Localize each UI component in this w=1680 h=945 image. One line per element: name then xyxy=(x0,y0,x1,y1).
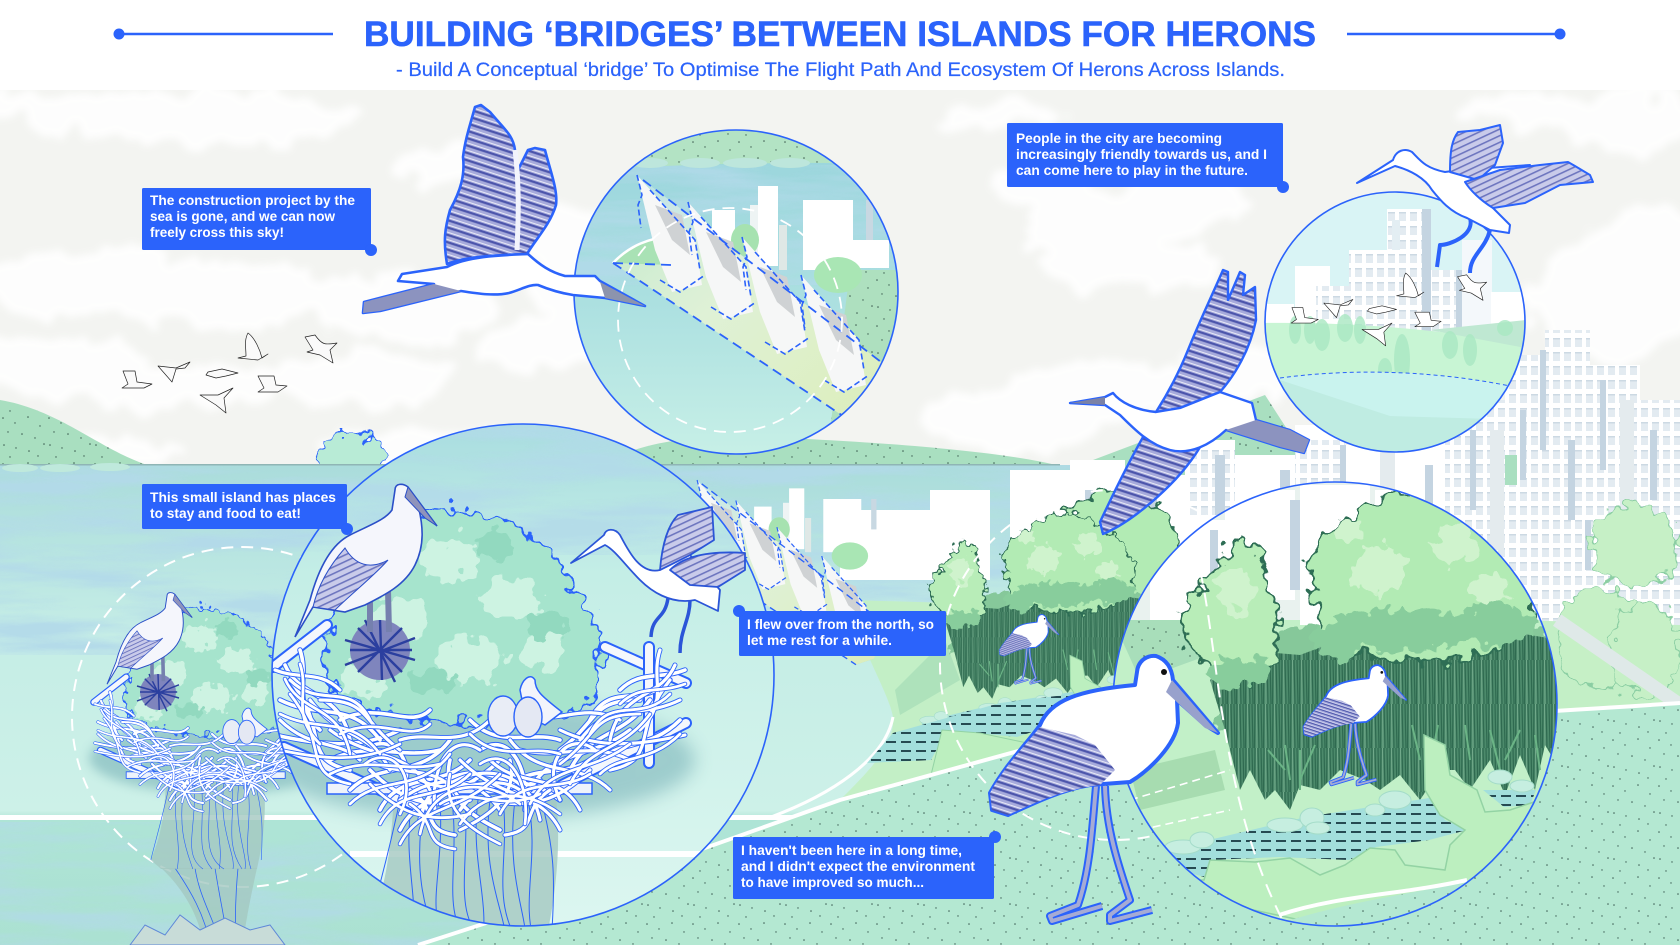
callout: construction project: sea is gone, and we can now xyxy=(150,208,335,224)
callout: flew from the north: let me rest for a while. xyxy=(747,632,892,648)
callout: construction project: The construction project by the xyxy=(150,192,355,208)
circle: city close-up xyxy=(1260,190,1530,460)
background bridge wedge xyxy=(679,480,889,665)
front land xyxy=(418,703,1680,945)
title rule left xyxy=(114,28,333,40)
callout: flew from the north: I flew over from the north, so xyxy=(747,616,934,632)
title rule right xyxy=(1347,28,1566,40)
callout: flew from the north xyxy=(733,605,946,656)
circle: nest island close-up xyxy=(265,424,774,945)
callout: improved environment xyxy=(733,831,1001,899)
callout: small island xyxy=(142,484,353,535)
heron: landing by the nest xyxy=(571,507,745,653)
mid ground land xyxy=(771,600,1680,817)
background extra tree xyxy=(1010,490,1193,624)
sky with clouds xyxy=(0,90,1680,490)
subtitle: - Build A Conceptual ‘bridge’ To Optimise The Flight Path And Ecosystem Of Herons Across Islands. xyxy=(396,59,1285,81)
distant small tree xyxy=(316,433,388,481)
heron: flying mid right xyxy=(1070,270,1309,534)
circle: bridge close-up xyxy=(570,125,905,460)
background road xyxy=(1557,620,1680,705)
callout: friendly people: can come here to play in the future. xyxy=(1016,162,1248,178)
background water xyxy=(867,693,1081,775)
left small nest island xyxy=(89,593,347,945)
sea xyxy=(0,463,1100,945)
dashed ghost rings xyxy=(72,490,1290,887)
heron: large standing foreground xyxy=(990,656,1218,921)
background city skyline xyxy=(840,330,1680,640)
distant hills xyxy=(0,395,1680,520)
circle: wetland close-up xyxy=(1110,480,1560,930)
callout: small island: This small island has places xyxy=(150,489,336,505)
callout: improved environment: to have improved so much... xyxy=(741,874,924,890)
callout: construction project xyxy=(142,188,377,256)
callout: friendly people: People in the city are becoming xyxy=(1016,130,1222,146)
heron: flying top right xyxy=(1357,125,1593,273)
callout: construction project: freely cross this sky! xyxy=(150,224,284,240)
callout: improved environment: I haven't been here in a long time, xyxy=(741,842,962,858)
right side shrubs xyxy=(1558,505,1680,695)
background wetland scene xyxy=(920,515,1149,763)
callout: small island: to stay and food to eat! xyxy=(150,505,301,521)
heron: flying top left xyxy=(363,105,645,313)
callout: friendly people: increasingly friendly towards us, and I xyxy=(1016,146,1267,162)
bird flock xyxy=(122,333,337,413)
callout: improved environment: and I didn't expect the environment xyxy=(741,858,975,874)
background small stork xyxy=(999,615,1059,683)
title: BUILDING ‘BRIDGES’ BETWEEN ISLANDS FOR HERONS xyxy=(364,15,1316,54)
callout: friendly people xyxy=(1007,123,1289,193)
